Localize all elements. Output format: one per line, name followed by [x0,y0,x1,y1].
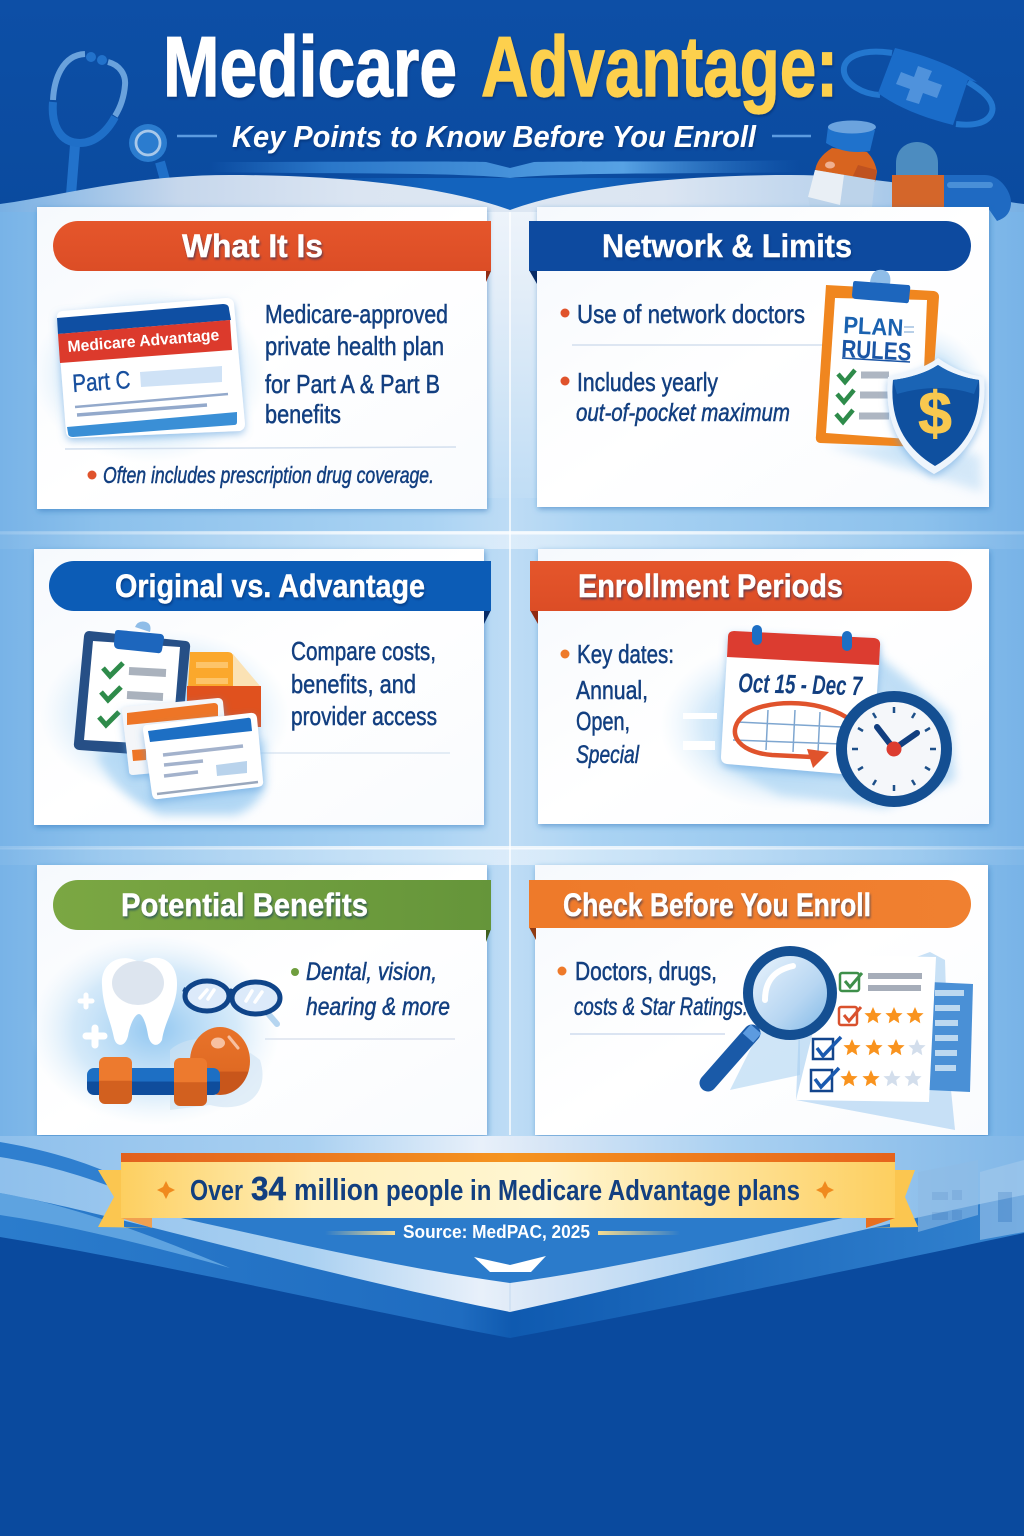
text: key dates: Annual, [576,675,648,705]
icon: tooth [30,935,280,1125]
panel: potential benefits [30,865,491,1135]
icon: comparison clipboard and cards [40,622,290,815]
text: plan description: for Part A & Part B [265,369,440,399]
icon: stethoscope [53,52,167,207]
text: compare costs: provider access [291,701,437,731]
text: plan description: Medicare-approved [265,299,448,329]
text: compare costs: benefits, and [291,669,416,699]
heading: enrollment periods [530,561,972,624]
text: extra benefits: hearing & more [306,993,450,1021]
text: check list [558,956,748,1021]
icon: face mask [844,48,993,125]
text: yearly maximum: out-of-pocket maximum [576,399,790,427]
icon: plan rules clipboard [816,270,990,492]
panel: original vs advantage [34,549,491,825]
heading: network and limits: Network & Limits [602,228,852,264]
heading: check before you enroll: Check Before You Enroll [563,887,871,923]
icon: calendar [660,625,955,810]
text: extra benefits [291,958,450,1021]
text: yearly maximum [560,367,790,427]
heading: original vs advantage [49,561,491,624]
icon: plan rules clipboard: RULES [841,335,912,367]
heading: potential benefits [53,880,491,942]
icon: medicare card [32,287,268,463]
banner: enrollment statistic [98,1153,918,1228]
text: drug coverage note: Often includes prescription drug coverage. [103,462,434,488]
text: key dates: Key dates: [577,639,674,669]
icon: calendar: Oct 15 - Dec 7 [738,668,864,701]
heading: check before you enroll [529,880,971,940]
panel: enrollment periods [530,549,989,824]
banner: enrollment statistic: people in Medicare Advantage plans [386,1175,800,1207]
subtitle: Key Points to Know Before You Enroll [232,119,757,154]
text: plan description: benefits [265,399,341,429]
title: Advantage: [481,20,838,115]
text: key dates [560,639,674,769]
panel: network and limits [529,207,990,507]
text: extra benefits: Dental, vision, [306,958,437,986]
icon: medicare card: Part C [71,366,131,398]
icon: medicare card: Medicare Advantage [67,327,220,356]
source line: Source: MedPAC, 2025 [403,1222,590,1242]
icon: plan rules clipboard: PLAN [843,312,904,342]
text: compare costs: Compare costs, [291,636,436,666]
icon: magnifying glass [708,951,832,1083]
panel: check before you enroll [529,865,988,1135]
banner: enrollment statistic: Over [190,1175,243,1207]
heading: network and limits [529,221,971,284]
heading: original vs advantage: Original vs. Advantage [115,568,425,604]
text: plan description [265,299,448,429]
icon: capsules [892,142,1011,221]
text: check list: costs & Star Ratings. [574,993,748,1021]
icon: clock [836,691,952,807]
icon: dumbbell and ball [87,1027,263,1110]
heading: what it is [53,221,491,282]
heading: enrollment periods: Enrollment Periods [578,568,843,604]
banner: enrollment statistic: 34 [251,1170,287,1207]
title [163,20,838,115]
title: Medicare [163,20,457,115]
banner: enrollment statistic: million [294,1172,379,1207]
icon: rating sheet [730,952,973,1130]
icon: shield with dollar: $ [918,380,952,447]
text: check list: Doctors, drugs, [575,956,717,986]
icon: shield with dollar [887,358,985,474]
panel: what it is [32,207,491,509]
open book backdrop [0,160,1024,212]
text: yearly maximum: Includes yearly [577,367,718,397]
source line [325,1222,680,1242]
heading: potential benefits: Potential Benefits [121,887,368,923]
icon: medicine bottle [808,120,877,207]
text: plan description: private health plan [265,331,444,361]
heading: what it is: What It Is [182,228,323,264]
text: key dates: Open, [576,706,630,736]
icon: faint buildings [918,1160,1024,1240]
bottom swooshes [0,1136,1024,1338]
icon: glasses [184,981,280,1024]
text: key dates: Special [576,741,640,769]
text: network doctors: Use of network doctors [577,299,805,329]
text: compare costs [291,636,437,731]
